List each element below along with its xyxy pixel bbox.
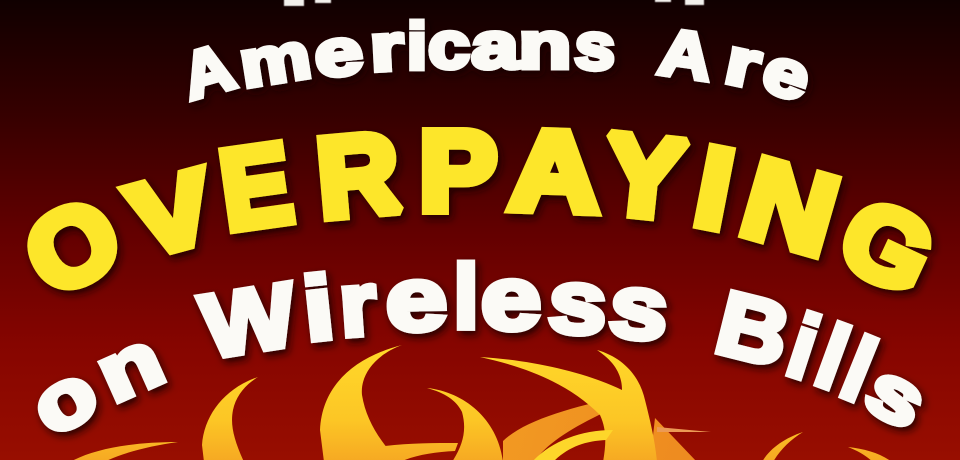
headline: OVERPAYING: I	[686, 122, 743, 253]
headline: Americans Are	[174, 8, 820, 116]
headline: on Wireless Bills: n	[84, 313, 176, 420]
headline: Americans Are: r	[368, 11, 405, 86]
headline: OVERPAYING: G	[824, 175, 951, 317]
headline: Americans Are: i	[407, 9, 427, 83]
flame: pale tips	[657, 427, 711, 432]
headline: on Wireless Bills: s	[546, 250, 609, 354]
headline: Americans Are: e	[311, 14, 366, 92]
headline: on Wireless Bills: i	[298, 257, 339, 360]
headline: on Wireless Bills: l	[453, 248, 479, 348]
flames illustration	[70, 345, 892, 460]
headline: on Wireless Bills: e	[481, 248, 541, 349]
headline: OVERPAYING: A	[507, 107, 602, 236]
flame: centre small	[427, 388, 503, 460]
headline: OVERPAYING: O	[6, 174, 139, 320]
headline: Americans Are: A	[174, 30, 242, 114]
headline: on Wireless Bills: e	[385, 249, 448, 350]
flame: left	[202, 377, 258, 460]
headline: OVERPAYING: V	[118, 148, 225, 279]
headline: on Wireless Bills: s	[606, 255, 672, 360]
headline: on Wireless Bills: W	[195, 264, 304, 378]
headline: Americans Are: c	[428, 8, 470, 82]
headline: Americans Are: e	[754, 31, 820, 116]
headline: Americans Are: n	[519, 9, 571, 83]
headline: on Wireless Bills: i	[777, 295, 830, 398]
headline: OVERPAYING	[6, 107, 951, 320]
flame: inner yellow	[532, 430, 613, 460]
flame: large centre	[320, 345, 402, 460]
headline: on Wireless Bills: l	[829, 319, 888, 421]
headline: OVERPAYING: P	[419, 109, 497, 235]
flame: horizontal branch	[385, 443, 458, 460]
headline: on Wireless Bills: B	[707, 271, 800, 386]
headline: OVERPAYING: R	[312, 109, 404, 241]
flame: orange middle	[503, 396, 622, 460]
headline: Americans Are: s	[573, 8, 616, 84]
headline: on Wireless Bills: r	[336, 252, 379, 356]
headline: Americans Are: a	[472, 9, 519, 83]
headline: on Wireless Bills: s	[853, 345, 940, 446]
flame: far left	[70, 442, 178, 460]
flame: small right	[762, 432, 803, 460]
flame: far right	[848, 447, 892, 460]
headline: on Wireless Bills: l	[804, 306, 861, 409]
headline: OVERPAYING: Y	[598, 110, 691, 243]
flame: orange right wedge	[650, 418, 697, 460]
clipped top headline fragments	[284, 0, 704, 6]
headline: Americans Are: r	[719, 24, 767, 103]
headline: Americans Are: A	[654, 14, 717, 95]
headline: OVERPAYING: E	[213, 120, 299, 255]
headline: Americans Are: m	[235, 18, 316, 102]
headline: on Wireless Bills: o	[15, 346, 112, 453]
headline: on Wireless Bills	[15, 248, 940, 453]
headline: OVERPAYING: N	[729, 134, 851, 280]
flame: main right	[480, 350, 657, 460]
